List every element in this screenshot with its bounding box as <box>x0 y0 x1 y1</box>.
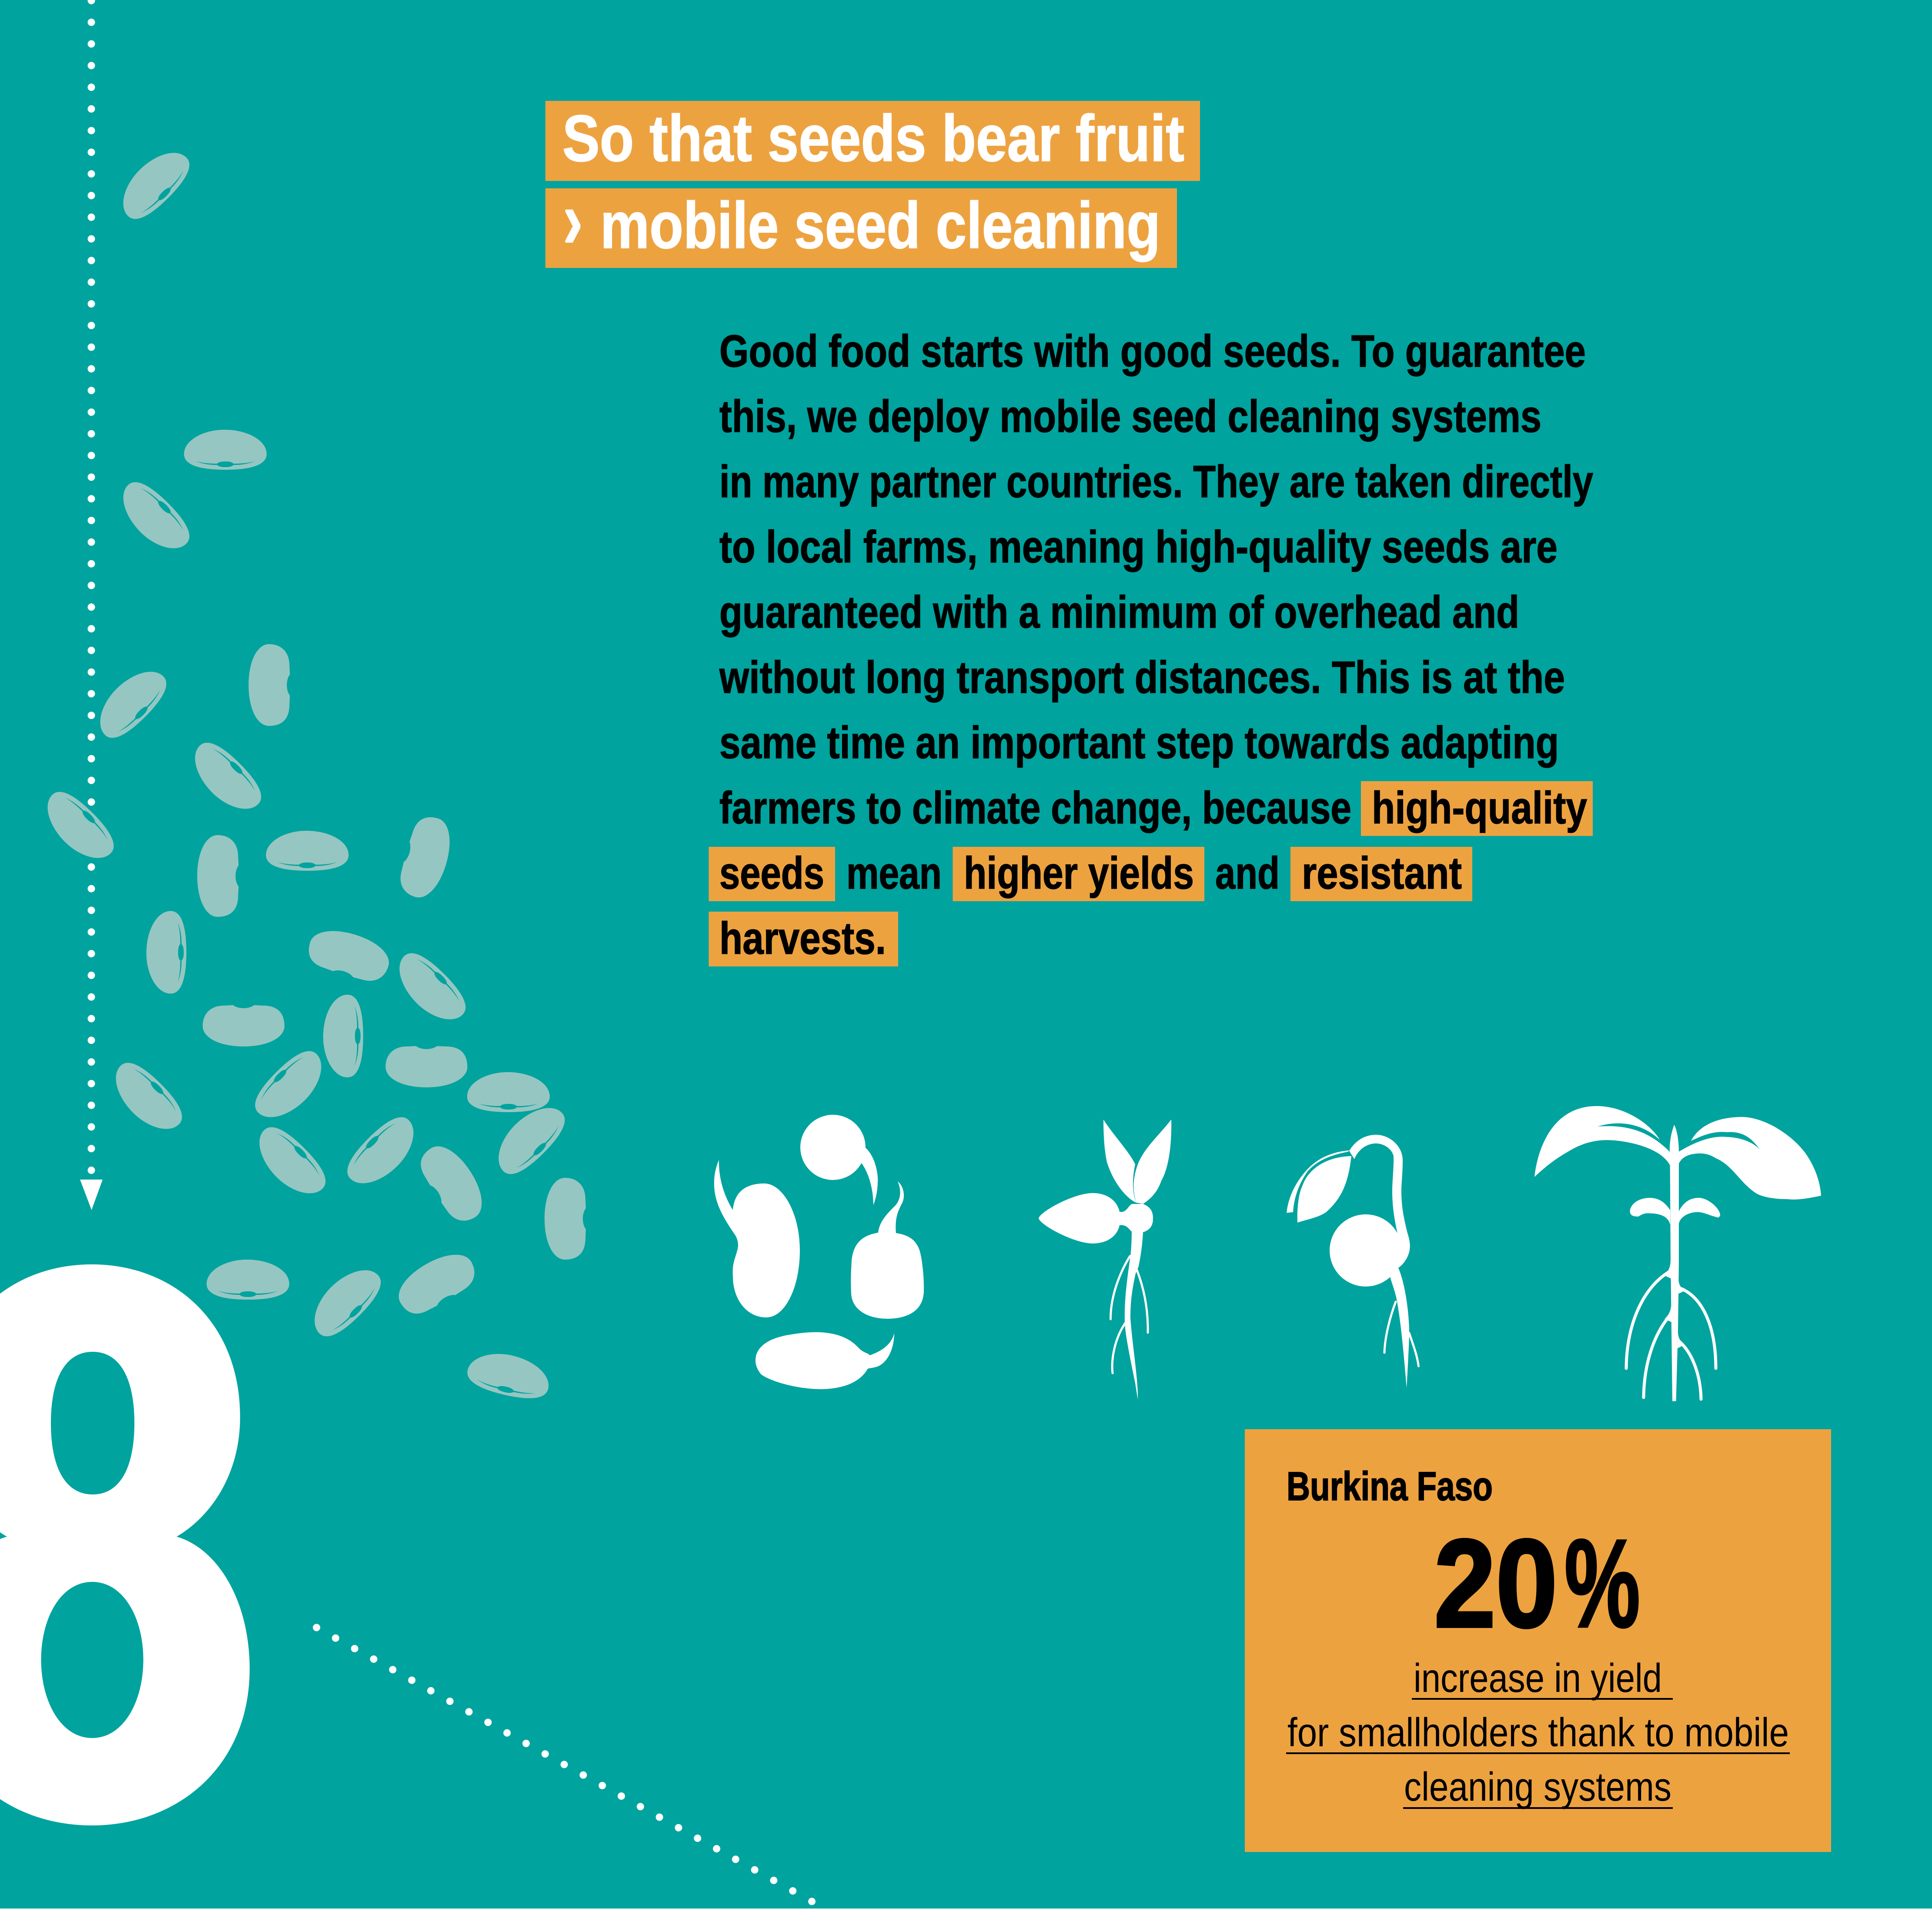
title line 2 <box>545 174 1177 268</box>
body text: seeds <box>719 848 824 899</box>
falling beans <box>35 140 586 1404</box>
bean <box>247 1043 334 1130</box>
body text: Good food starts with good seeds. To guarantee <box>719 326 1586 377</box>
bean <box>302 1258 389 1344</box>
bean <box>203 1005 284 1046</box>
panel: Burkina Faso callout <box>1245 1429 1831 1852</box>
bean <box>390 1244 481 1321</box>
body text: without long transport distances. This is at the <box>719 652 1565 703</box>
bean <box>266 831 349 871</box>
body text: farmers to climate change, because <box>719 783 1351 833</box>
bean <box>88 659 174 746</box>
bean <box>304 923 394 986</box>
body text: high-quality <box>1372 783 1587 833</box>
body text: mean <box>846 848 942 899</box>
statistic <box>1434 1514 1640 1654</box>
bean <box>207 1260 289 1300</box>
bean <box>387 945 474 1032</box>
bean <box>104 1055 190 1141</box>
bean <box>197 835 238 917</box>
bean <box>247 1119 334 1206</box>
bean <box>249 644 290 726</box>
bean <box>464 1347 554 1404</box>
callout description: increase in yield <box>1414 1655 1662 1701</box>
body text: harvests. <box>719 913 886 964</box>
bean <box>184 430 267 470</box>
dotted arrow: vertical falling seeds path <box>80 0 103 1210</box>
bean <box>467 1072 550 1112</box>
bean <box>414 1137 493 1228</box>
dotted line: lower diagonal <box>317 1628 814 1902</box>
callout heading: Burkina Faso <box>1287 1464 1493 1509</box>
statistic: 20 <box>1434 1514 1558 1654</box>
bean <box>486 1096 573 1182</box>
bean <box>183 735 269 821</box>
icon: seedling emerging from seed <box>1287 1135 1419 1388</box>
bean <box>323 995 363 1077</box>
bean <box>111 474 197 561</box>
body text: in many partner countries. They are taken directly <box>719 457 1593 507</box>
body text: and <box>1215 848 1280 899</box>
icon: germinating seeds <box>714 1115 924 1389</box>
bean <box>385 1046 467 1087</box>
bean <box>146 911 186 993</box>
body text: guaranteed with a minimum of overhead and <box>719 587 1519 638</box>
statistic: % <box>1564 1514 1640 1654</box>
callout description: for smallholders thank to mobile <box>1287 1710 1789 1755</box>
icon: seedling with two narrow leaves <box>1039 1120 1171 1400</box>
bean <box>339 1109 426 1196</box>
body text: same time an important step towards adapting <box>719 718 1559 768</box>
callout description: cleaning systems <box>1404 1764 1671 1809</box>
body text: to local farms, meaning high-quality seeds are <box>719 522 1558 572</box>
icon: young plant <box>1534 1106 1821 1401</box>
title line 2: › <box>563 174 583 266</box>
bean <box>35 784 122 870</box>
bean <box>395 812 458 902</box>
body text <box>709 326 1593 966</box>
body text: this, we deploy mobile seed cleaning systems <box>719 391 1541 442</box>
body text: resistant <box>1302 848 1462 899</box>
bean <box>111 140 197 227</box>
callout description <box>1286 1655 1790 1809</box>
title line 1: So that seeds bear fruit <box>562 101 1184 175</box>
arrowhead <box>80 1180 103 1210</box>
bean <box>545 1178 586 1260</box>
title line 2: mobile seed cleaning <box>600 188 1160 262</box>
body text: higher yields <box>964 848 1194 899</box>
